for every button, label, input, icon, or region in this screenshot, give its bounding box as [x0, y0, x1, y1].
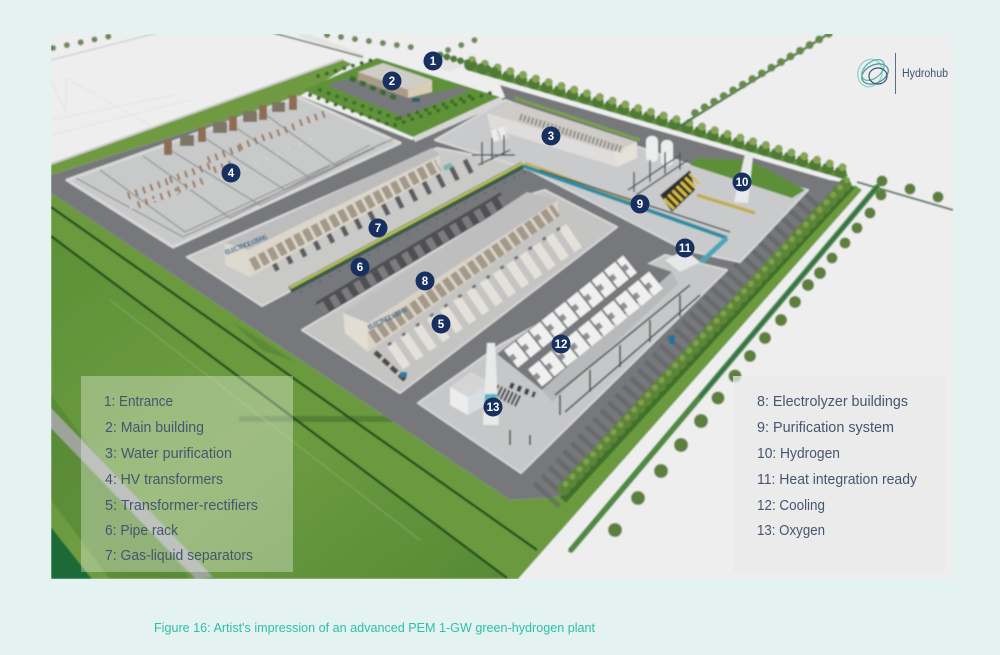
badge 10: [732, 172, 752, 192]
tree rows: [53, 33, 953, 550]
badge 8: [416, 272, 434, 290]
Hydrohub logo: Hydrohub: [902, 68, 948, 80]
blue vehicle: [669, 335, 675, 344]
badge 7: [368, 218, 388, 238]
legend panel right: [733, 376, 945, 572]
legend entries 1-7: 7: Gas-liquid separators: [105, 547, 253, 564]
road shadow stripes: [545, 200, 815, 497]
badge 12: [552, 334, 570, 354]
badge 4: [222, 164, 240, 182]
badge 13: 13: [487, 402, 499, 414]
badge 12: 12: [555, 339, 567, 351]
badge 6: 6: [357, 262, 363, 274]
oxygen stack: [483, 343, 499, 425]
heat integration block: [665, 250, 700, 272]
soft rendered scene: [51, 33, 954, 579]
aerial plant illustration: [51, 33, 954, 579]
building label: ELECTROLYZERS: [367, 307, 409, 332]
oxygen building: [450, 372, 491, 415]
logo swirl icon: [854, 56, 891, 90]
plot: main building grounds: [303, 58, 505, 142]
badge 4: 4: [228, 168, 235, 180]
north-east lane: [680, 33, 830, 126]
building label: ELECTROLYZERS: [224, 234, 269, 257]
badge 7: 7: [375, 223, 381, 235]
field power lines: [51, 34, 364, 112]
legend entries 1-7: 4: HV transformers: [105, 471, 223, 488]
cooling rack frame: [510, 285, 700, 445]
badge 9: [630, 194, 650, 214]
legend entries 1-7: 1: Entrance: [104, 393, 173, 410]
substation plot: [67, 95, 400, 247]
water purification building: [487, 98, 640, 167]
badge 13: [484, 398, 502, 416]
oxygen equipment: [495, 390, 520, 402]
badge 3: [542, 126, 560, 146]
perimeter road: [51, 85, 848, 500]
water purification tanks: [492, 132, 508, 136]
lattice towers: [628, 152, 688, 195]
electrolyzer building 1: [224, 148, 440, 277]
hydrogen stack: [734, 155, 754, 204]
badge 11: 11: [679, 243, 692, 255]
east hedge: [558, 180, 852, 500]
badge 1: 1: [430, 56, 437, 68]
badge 5: 5: [438, 319, 445, 331]
switchgear rows: [128, 112, 330, 205]
legend entries 8-13: 13: Oxygen: [757, 522, 825, 539]
dark transformer row pad: [320, 200, 505, 310]
badge 1: [424, 52, 442, 70]
legend panel left: [81, 376, 293, 572]
pipe rack: [288, 161, 731, 294]
white storage tanks: [646, 136, 673, 166]
electrolyzer pad 1: [187, 148, 528, 306]
electrolyzer pad 2: [302, 190, 617, 393]
legend entries 8-13: [757, 393, 917, 539]
legend entries 8-13: 12: Cooling: [757, 497, 825, 514]
badge 3: 3: [548, 131, 554, 143]
legend entries 8-13: 10: Hydrogen: [757, 445, 840, 462]
hydrogen header pipe: [697, 195, 755, 213]
badge 9: 9: [637, 199, 643, 211]
east lane: [571, 182, 953, 550]
electrolyzer building 2: [343, 192, 558, 352]
legend entries 1-7: 5: Transformer-rectifiers: [105, 497, 258, 514]
Hydrohub logo: [854, 53, 948, 94]
white fields: [51, 34, 954, 579]
cooling pad: [418, 255, 727, 473]
transformer-rectifier units: [388, 228, 575, 358]
transformers: [164, 95, 297, 155]
legend entries 1-7: [104, 393, 258, 564]
entrance tree rows: [53, 34, 500, 72]
purification columns: [660, 170, 695, 212]
legend entries 8-13: 11: Heat integration ready: [757, 471, 917, 488]
legend entries 8-13: 8: Electrolyzer buildings: [757, 393, 908, 410]
badge 8: 8: [422, 276, 429, 288]
cooling blocks: [497, 256, 678, 402]
row of gas-liquid separators: [258, 163, 475, 265]
badge 5: [432, 314, 450, 334]
legend entries 1-7: 6: Pipe rack: [105, 522, 178, 539]
grass patch: [690, 158, 805, 198]
main north tree row: [470, 60, 849, 177]
legend entries 1-7: 2: Main building: [105, 419, 204, 436]
badge 11: [676, 238, 694, 258]
racks near purification: [472, 135, 515, 165]
lower-left green verge: [51, 185, 862, 579]
busbar lines: [76, 112, 395, 237]
entrance gatehouse: [423, 60, 460, 71]
north pad: [435, 100, 808, 262]
building: main building: [350, 63, 432, 102]
badge 6: [350, 258, 370, 276]
badge 10: 10: [736, 177, 748, 189]
legend entries 1-7: 3: Water purification: [105, 445, 232, 462]
figure caption: Figure 16: Artist's impression of an advanced PEM 1-GW green-hydrogen plant: [154, 621, 596, 635]
pad equipment: [375, 352, 405, 380]
legend entries 8-13: 9: Purification system: [757, 419, 894, 436]
badge 2: [382, 72, 402, 90]
lane trees: [608, 176, 944, 537]
badge 2: 2: [389, 76, 395, 88]
green strip along road: [51, 60, 352, 175]
number badges: [222, 52, 752, 416]
